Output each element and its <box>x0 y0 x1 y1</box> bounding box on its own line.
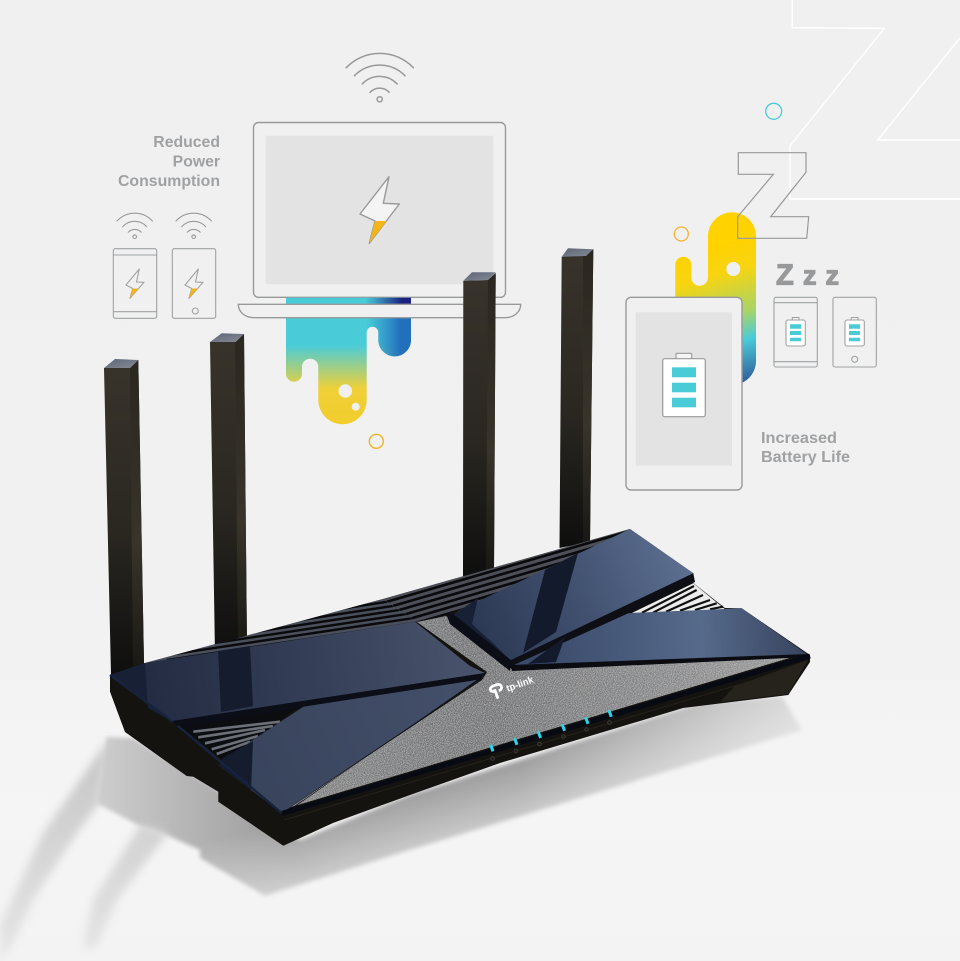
icon: tablet <box>626 297 742 490</box>
antenna 2 <box>210 333 247 655</box>
front vents <box>180 708 297 760</box>
icon: right phone with battery <box>833 297 876 367</box>
icon: large outline Z <box>738 153 809 238</box>
antenna 1 <box>104 359 144 675</box>
top gray plate <box>291 616 796 807</box>
panel: back right <box>447 529 695 671</box>
router <box>104 248 810 846</box>
icon: tablet battery <box>663 353 705 417</box>
heading: reduced power consumption <box>118 134 220 190</box>
icon: sleeping z z z: z <box>803 260 816 290</box>
heading: increased battery life <box>761 430 850 466</box>
antenna 4 <box>560 248 593 548</box>
background outline letter Z <box>790 0 960 199</box>
icon: sleeping z z z: z <box>826 260 839 290</box>
icon: laptop lightning bolt <box>360 177 399 243</box>
heading: increased battery life: Increased <box>761 430 837 447</box>
illustration: colour drip under laptop <box>286 297 411 424</box>
icon: orange ring <box>674 227 688 241</box>
front edge <box>110 656 810 820</box>
status icons <box>491 721 611 760</box>
router shadow <box>0 697 802 961</box>
tp-link logo <box>489 672 535 700</box>
icon: right phone with bolt <box>172 249 216 318</box>
panel: back left <box>110 622 485 729</box>
panel: front left <box>218 675 484 813</box>
icon: large wifi <box>346 53 413 102</box>
panel: right <box>511 608 810 671</box>
router body <box>110 529 810 846</box>
illustration: colour drip behind tablet <box>675 212 756 385</box>
icon: right wifi <box>176 213 211 238</box>
heading: reduced power consumption: Power <box>173 154 220 170</box>
back vents <box>137 528 640 663</box>
antenna 3 <box>463 272 496 577</box>
heading: reduced power consumption: Reduced <box>153 134 220 151</box>
tp-link logo: tp-link <box>505 675 535 695</box>
status LEDs <box>490 710 611 751</box>
icon: sleeping z z z: Z <box>776 260 794 292</box>
heading: increased battery life: Battery Life <box>761 449 850 466</box>
panel: increased battery life <box>626 103 876 490</box>
right vents <box>632 583 725 613</box>
panel: reduced power consumption <box>113 53 521 448</box>
heading: reduced power consumption: Consumption <box>118 173 220 190</box>
icon: left wifi <box>117 213 152 238</box>
icon: left phone with battery <box>774 297 817 367</box>
icon: cyan ring <box>766 103 782 119</box>
icon: sleeping z z z <box>776 260 839 292</box>
icon: left phone with bolt <box>113 249 157 318</box>
icon: laptop <box>238 122 521 318</box>
icon: orange ring <box>369 434 383 448</box>
